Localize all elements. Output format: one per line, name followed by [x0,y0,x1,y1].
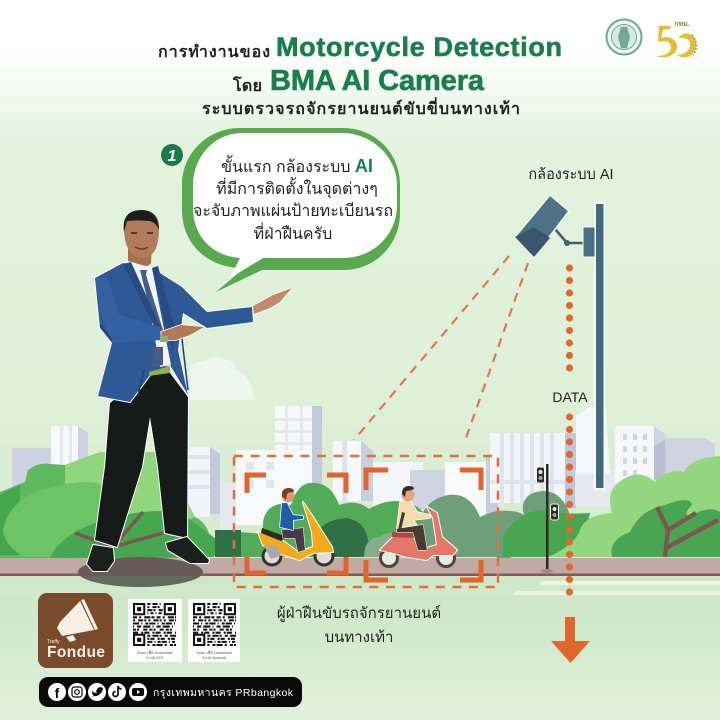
Traffy Fondue logo [38,593,113,668]
arrow down [551,617,590,663]
bubble text: ที่มีการติดตั้งในจุดต่างๆ [216,177,378,199]
icon: facebook: f [55,685,60,701]
title [158,32,562,118]
icon: tiktok [108,683,126,701]
title: การทำงานของ [158,43,270,61]
speech bubble [182,128,400,292]
social media bar: กรุงเทพมหานคร PRbangkok [153,687,294,699]
QR code iOS: Scan เพื่อ Download [137,650,172,655]
QR code Android: Scan เพื่อ Download [196,650,232,655]
logo: BMA seal [606,20,642,54]
trousers [95,373,188,547]
presenter [87,210,292,571]
jacket [95,263,253,402]
QR code iOS [128,599,182,662]
belt [149,366,170,376]
person shadow [78,557,203,587]
bushes left [0,452,220,559]
shirt [125,260,171,367]
bushes right [503,456,720,557]
title: โดย [232,75,262,95]
neck and head [124,210,159,272]
watch [160,336,168,342]
scooter: red [380,486,457,566]
traffic light [536,464,558,573]
scooter: yellow [258,488,333,565]
tie [140,270,163,367]
icon: AI camera [515,195,595,257]
bushes centre [215,483,570,560]
logo: 50 years: กทม. [674,21,690,28]
logo: 50 years [656,21,696,57]
sleeve [95,278,162,343]
icon: youtube [129,683,147,701]
detection frame [234,456,498,587]
data flow dots [566,264,573,596]
QR code Android: ระบบ Android [202,655,226,660]
Traffy Fondue logo: Fondue [47,644,105,661]
badge: step 1: 1 [168,148,177,165]
icon: megaphone [57,599,98,642]
badge: step 1 [161,144,183,166]
detection brackets rider 2 [366,470,481,580]
pedestrian crossing [512,581,720,595]
offender caption: ผู้ฝ่าฝืนขับรถจักรยานยนต์ [277,605,441,622]
lapel [123,262,176,352]
offender caption [277,605,441,646]
title: ระบบตรวจรถจักรยานยนต์ขับขี่บนทางเท้า [202,97,520,118]
bubble text: ขั้นแรก กล้องระบบ AI [221,155,373,176]
hands [161,325,204,340]
title: Motorcycle Detection [276,32,562,62]
skyline buildings [12,357,715,532]
label: data: DATA [552,389,588,405]
camera view dashed lines [354,256,528,440]
title: BMA AI Camera [270,65,485,97]
bubble text [193,155,393,243]
Traffy Fondue logo: Traffy [47,639,60,645]
jacket folds [100,322,188,395]
camera pole [595,203,604,489]
icon: facebook [48,683,66,701]
detection brackets rider 1 [247,475,346,573]
QR code iOS: ระบบ iOS [146,655,163,660]
offender caption: บนทางเท้า [325,629,393,646]
bubble text: จะจับภาพแผ่นป้ายทะเบียนรถ [193,202,393,220]
icon: twitter [88,683,106,701]
shoes [87,537,209,571]
social media bar [39,677,302,707]
QR code Android [188,599,240,662]
sidewalk and road edge [0,558,720,584]
bubble text: ที่ฝ่าฝืนครับ [254,222,332,243]
label: AI camera: กล้องระบบ AI [528,166,614,183]
icon: instagram [68,683,86,701]
